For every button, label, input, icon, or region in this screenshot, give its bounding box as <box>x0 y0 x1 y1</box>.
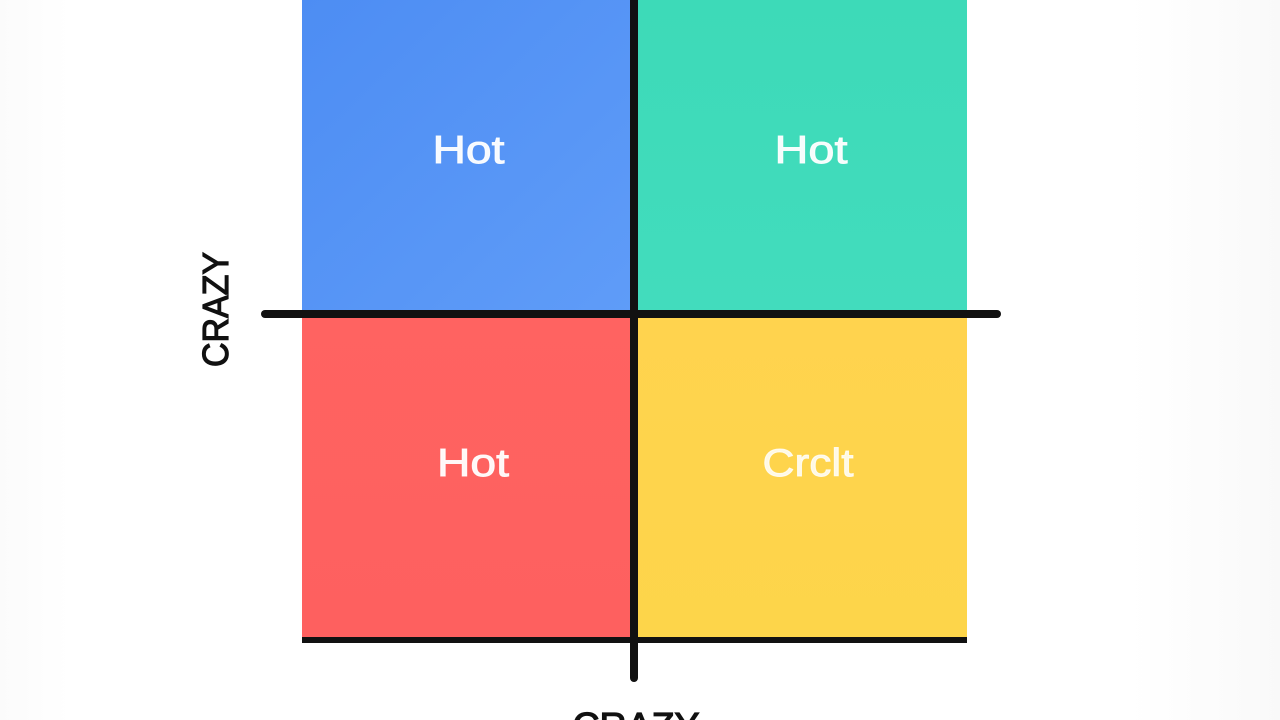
quadrant: bottom right yellow <box>636 314 967 640</box>
label: bottom right Crclt: Crclt <box>762 442 854 485</box>
horizontal axis line <box>265 310 997 318</box>
label: top left Hot: Hot <box>432 129 505 172</box>
bottom border line <box>302 637 967 643</box>
label: bottom left Hot: Hot <box>437 442 509 485</box>
quadrant: bottom left red <box>302 314 632 640</box>
quadrant: top left blue <box>302 0 632 314</box>
label: top right Hot: Hot <box>774 129 848 172</box>
quadrant: top right teal <box>636 0 967 314</box>
y axis label: CRAZY <box>195 252 236 367</box>
vertical axis line <box>630 0 638 678</box>
